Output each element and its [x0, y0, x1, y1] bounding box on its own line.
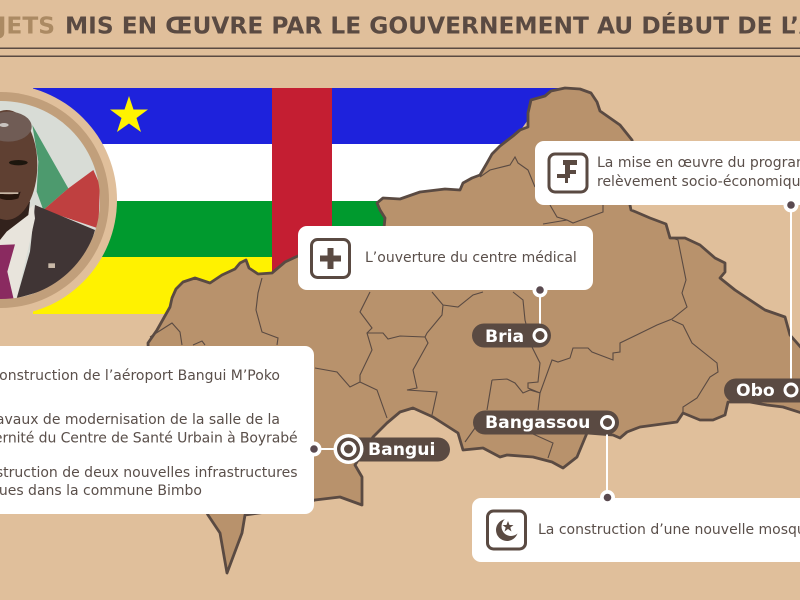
- callout: medical centre: [298, 226, 593, 290]
- flag of the Central African Republic: [33, 88, 573, 314]
- location: Obo: Obo: [736, 381, 775, 401]
- callout: Bangui projects: [0, 346, 314, 514]
- location: Bangassou: [473, 410, 619, 434]
- location: Obo: [724, 378, 800, 402]
- location: Bria: [472, 324, 551, 348]
- icon: crescent and star: [488, 511, 526, 549]
- icon: franc sign: [549, 154, 587, 192]
- callout: new mosque: [472, 498, 800, 562]
- map of the Central African Republic: [148, 88, 800, 573]
- callout: socio-economic recovery programme: [535, 141, 800, 205]
- location: Bangui: [334, 434, 450, 464]
- location: Bangassou: Bangassou: [485, 413, 590, 433]
- location: Bria: Bria: [485, 327, 524, 347]
- icon: medical cross: [312, 240, 350, 278]
- location: Bangui: Bangui: [368, 440, 435, 460]
- portrait medallion: [0, 84, 117, 316]
- connector end dots: [306, 198, 798, 505]
- connector lines: [314, 205, 791, 497]
- callout: medical centre: L’ouverture du centre médical: [365, 250, 577, 266]
- title rules: [0, 48, 800, 57]
